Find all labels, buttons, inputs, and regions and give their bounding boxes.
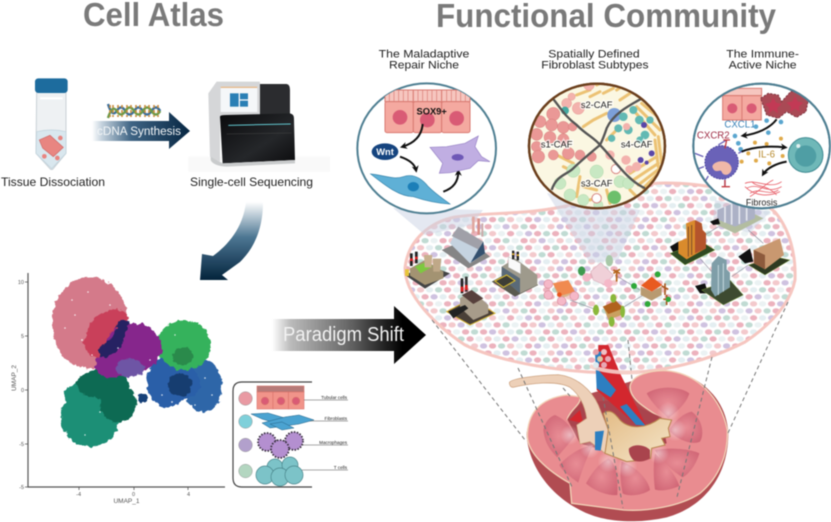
- epithelial cells: [385, 90, 470, 133]
- arrow fibroblast to myofibroblast: [443, 172, 458, 192]
- UMAP clusters: [52, 277, 222, 447]
- niche heading line 2: Active Niche: [729, 59, 797, 71]
- legend labels: [319, 395, 348, 470]
- axis tick labels: 10: [18, 280, 24, 286]
- label: Tissue Dissociation: Tissue Dissociation: [1, 175, 105, 189]
- chemokine dots: [733, 118, 783, 152]
- factory 4: conveyor plant: [447, 277, 495, 325]
- axis title: UMAP_2: UMAP_2: [11, 365, 18, 391]
- arrow Wnt to fibroblast: [400, 157, 416, 170]
- legend labels: Fibroblasts: [325, 416, 348, 421]
- pelvis calyx opening: [629, 445, 650, 462]
- niche heading: The Immune-: [726, 48, 799, 60]
- kidney cross-section: [509, 345, 728, 521]
- tower 3: tan: [738, 238, 790, 275]
- subtype labels: [541, 100, 653, 189]
- arrow: cDNA Synthesis: [92, 112, 190, 149]
- macrophage: [695, 140, 745, 187]
- residential houses cluster: [544, 255, 671, 327]
- label: Fibrosis: Fibrosis: [746, 197, 778, 207]
- icon: DNA helix: [108, 104, 160, 118]
- high-rise buildings cluster: [670, 202, 790, 305]
- axes: [28, 273, 225, 487]
- axis tick labels: -5: [19, 485, 24, 491]
- factory 1: cooling towers: [405, 252, 450, 289]
- s2 cells: [562, 80, 594, 114]
- axis tick labels: -4: [76, 492, 81, 498]
- purple myofibroblast: [430, 136, 490, 173]
- label: SOX9+: SOX9+: [416, 107, 447, 117]
- niche heading line 2: Repair Niche: [389, 59, 459, 71]
- legend icon: tubular cells: [257, 386, 304, 409]
- cell nuclei: [393, 110, 464, 127]
- axis tick labels: 0: [132, 492, 135, 498]
- T cell: [788, 138, 823, 172]
- legend icon: T cells: [256, 457, 303, 486]
- tower 1: orange: [670, 220, 715, 265]
- fibrosis fibers: [745, 180, 782, 197]
- legend leader lines: [301, 400, 348, 470]
- s3 green cells: [554, 164, 634, 210]
- tissue map with cell dot pattern: [405, 183, 795, 373]
- arrow: cDNA Synthesis: cDNA Synthesis: [97, 126, 181, 138]
- house 3: brown roof: [593, 294, 625, 327]
- house 2: faded pink: [578, 255, 620, 288]
- axis tick labels: 4: [187, 492, 190, 498]
- ureter: [509, 375, 608, 453]
- s1 red cells: [531, 107, 596, 163]
- niche: spatially defined fibroblast subtypes: [529, 48, 665, 210]
- renal pelvis: [603, 411, 672, 462]
- axis tick labels: -5: [19, 442, 24, 448]
- chart: UMAP scatter: [11, 273, 225, 505]
- s4 teal cells: [608, 106, 654, 144]
- tissue edge over vessels: [590, 349, 640, 372]
- house 4: red-orange roof: [631, 271, 671, 307]
- niche: immune-active: [693, 48, 830, 208]
- legend icon: fibroblasts: [251, 413, 314, 430]
- network links: [700, 227, 763, 277]
- arrow: curved down to UMAP: [200, 202, 263, 280]
- arrow: Paradigm Shift: Paradigm Shift: [283, 324, 404, 346]
- niche heading: The Maladaptive: [379, 48, 469, 60]
- arrow dying cells to macrophage: [743, 119, 777, 136]
- axis tick labels: 0: [21, 388, 24, 394]
- epithelial nuclei: [727, 103, 757, 113]
- label: CXCL1: CXCL1: [724, 119, 756, 130]
- legend swatches: [239, 392, 252, 478]
- kidney outer wall: [527, 371, 728, 521]
- kidney cut face: [527, 371, 727, 510]
- legend: cell types: [233, 382, 348, 487]
- renal hilum hollow: [567, 400, 667, 453]
- Wnt badge: Wnt: [376, 147, 394, 157]
- magnifier ring: [693, 84, 830, 208]
- epithelial cells: [723, 88, 762, 120]
- renal pyramids: [543, 388, 702, 495]
- arrow macrophage to T cell: [742, 147, 785, 152]
- legend icon: macrophages: [258, 432, 303, 458]
- inner vessels: [595, 431, 604, 451]
- blue fibroblast: [371, 174, 450, 204]
- icon: sample tube with tissue: [35, 78, 68, 170]
- magnifier circle background: [357, 83, 496, 213]
- tower 2: grey: [710, 202, 763, 233]
- axis tick labels: [18, 280, 190, 498]
- niche heading: Spatially Defined: [548, 48, 640, 60]
- network links: [570, 275, 643, 310]
- label: CXCR2: CXCR2: [697, 131, 730, 142]
- label: Single-cell Sequencing: Single-cell Sequencing: [190, 175, 313, 189]
- renal vessels: [569, 345, 647, 427]
- pyramid highlights: [560, 402, 686, 477]
- niche heading line 2: Fibroblast Subtypes: [541, 59, 649, 71]
- niche: maladaptive repair: [357, 48, 496, 213]
- axis title: UMAP_1: UMAP_1: [113, 498, 140, 505]
- subtype labels: s2-CAF: [581, 100, 613, 110]
- axis tick labels: 5: [21, 334, 24, 340]
- subtype labels: s1-CAF: [541, 139, 573, 149]
- factory 2: grey roof hall: [442, 217, 490, 268]
- magnifier contents: [371, 90, 490, 204]
- compartment boundaries: [550, 95, 645, 190]
- arrow: Paradigm Shift: [272, 306, 426, 364]
- axis ticks: [25, 282, 188, 490]
- fibroblast spindles: [558, 84, 663, 206]
- magnifier circle background: [693, 84, 830, 208]
- tower 4: teal glass: [695, 256, 743, 305]
- legend labels: Tubular cells: [321, 395, 348, 400]
- magnifier contents: [531, 75, 662, 210]
- magnifier contents: [695, 88, 823, 207]
- factory buildings cluster: [405, 217, 538, 325]
- icon: sequencing machine: [188, 82, 330, 172]
- legend labels: Macrophages: [319, 440, 348, 445]
- magnifier circle background: [529, 84, 665, 208]
- subtype labels: s4-CAF: [621, 139, 653, 149]
- magnifier ring: [529, 84, 665, 208]
- factory 3: billboard: [492, 251, 538, 297]
- subtype labels: s3-CAF: [581, 179, 613, 189]
- dashed projection lines: [432, 302, 788, 508]
- cluster speckles: [64, 291, 213, 436]
- s4 purple and pink cells: [638, 122, 655, 165]
- label: IL-6: IL-6: [758, 149, 775, 160]
- dying cells: [761, 90, 808, 118]
- arrow T cell to fibrosis: [763, 162, 787, 174]
- arrow SOX9 to Wnt: [403, 124, 423, 147]
- projection cones from niches: [393, 193, 770, 263]
- house 1: orange roof with pink trees: [544, 280, 579, 305]
- legend labels: T cells: [334, 465, 348, 470]
